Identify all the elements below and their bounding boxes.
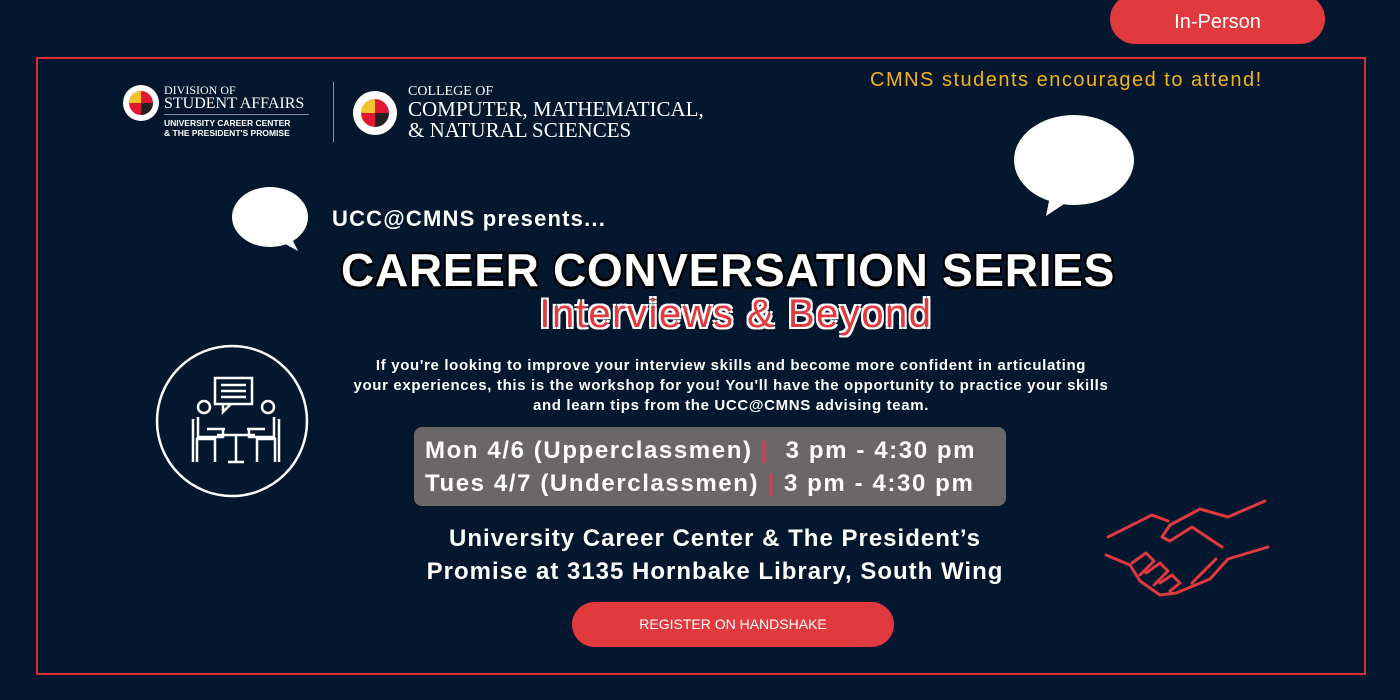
icon: interview	[156, 344, 308, 498]
location text: University Career Center & The President’s	[449, 525, 981, 552]
logo: division of student affairs: & THE PRESIDENT'S PROMISE	[164, 128, 290, 138]
badge: in-person: In-Person	[1174, 11, 1261, 33]
logo: CMNS: & NATURAL SCIENCES	[408, 118, 631, 142]
icon: speech bubble right	[1014, 115, 1134, 216]
callout: CMNS students encouraged: CMNS students encouraged to attend!	[870, 69, 1263, 91]
subtitle: presents: UCC@CMNS presents...	[332, 206, 606, 231]
icon: handshake	[1104, 500, 1270, 596]
logo: division of student affairs: UNIVERSITY CAREER CENTER	[164, 118, 290, 128]
badge: in-person	[1110, 0, 1325, 44]
location text	[427, 525, 1003, 585]
panel: schedule	[414, 427, 1006, 506]
description text: If you're looking to improve your interview skills and become more confident in articulating	[376, 357, 1086, 374]
logo: CMNS: COLLEGE OF	[408, 84, 493, 99]
description text: your experiences, this is the workshop for you! You'll have the opportunity to practice your skills	[353, 377, 1108, 394]
button: register: REGISTER ON HANDSHAKE	[639, 616, 827, 632]
logo: CMNS	[353, 84, 704, 142]
logos	[123, 82, 704, 142]
panel: schedule: Mon 4/6 (Upperclassmen) | 3 pm - 4:30 pm	[425, 437, 976, 464]
logo: division of student affairs	[123, 83, 309, 138]
location text: Promise at 3135 Hornbake Library, South Wing	[427, 558, 1003, 585]
description text	[353, 357, 1108, 414]
title: CAREER CONVERSATION SERIES	[341, 244, 1115, 296]
button: register	[572, 602, 894, 647]
panel: schedule: Tues 4/7 (Underclassmen) | 3 pm - 4:30 pm	[425, 470, 974, 497]
icon: speech bubble left	[232, 187, 308, 251]
logo: CMNS: COMPUTER, MATHEMATICAL,	[408, 97, 704, 121]
description text: and learn tips from the UCC@CMNS advising team.	[533, 397, 929, 414]
logo: division of student affairs: DIVISION OF	[164, 83, 236, 97]
logo: division of student affairs: STUDENT AFFAIRS	[164, 95, 304, 112]
title: Interviews & Beyond: Interviews & Beyond	[539, 292, 933, 336]
